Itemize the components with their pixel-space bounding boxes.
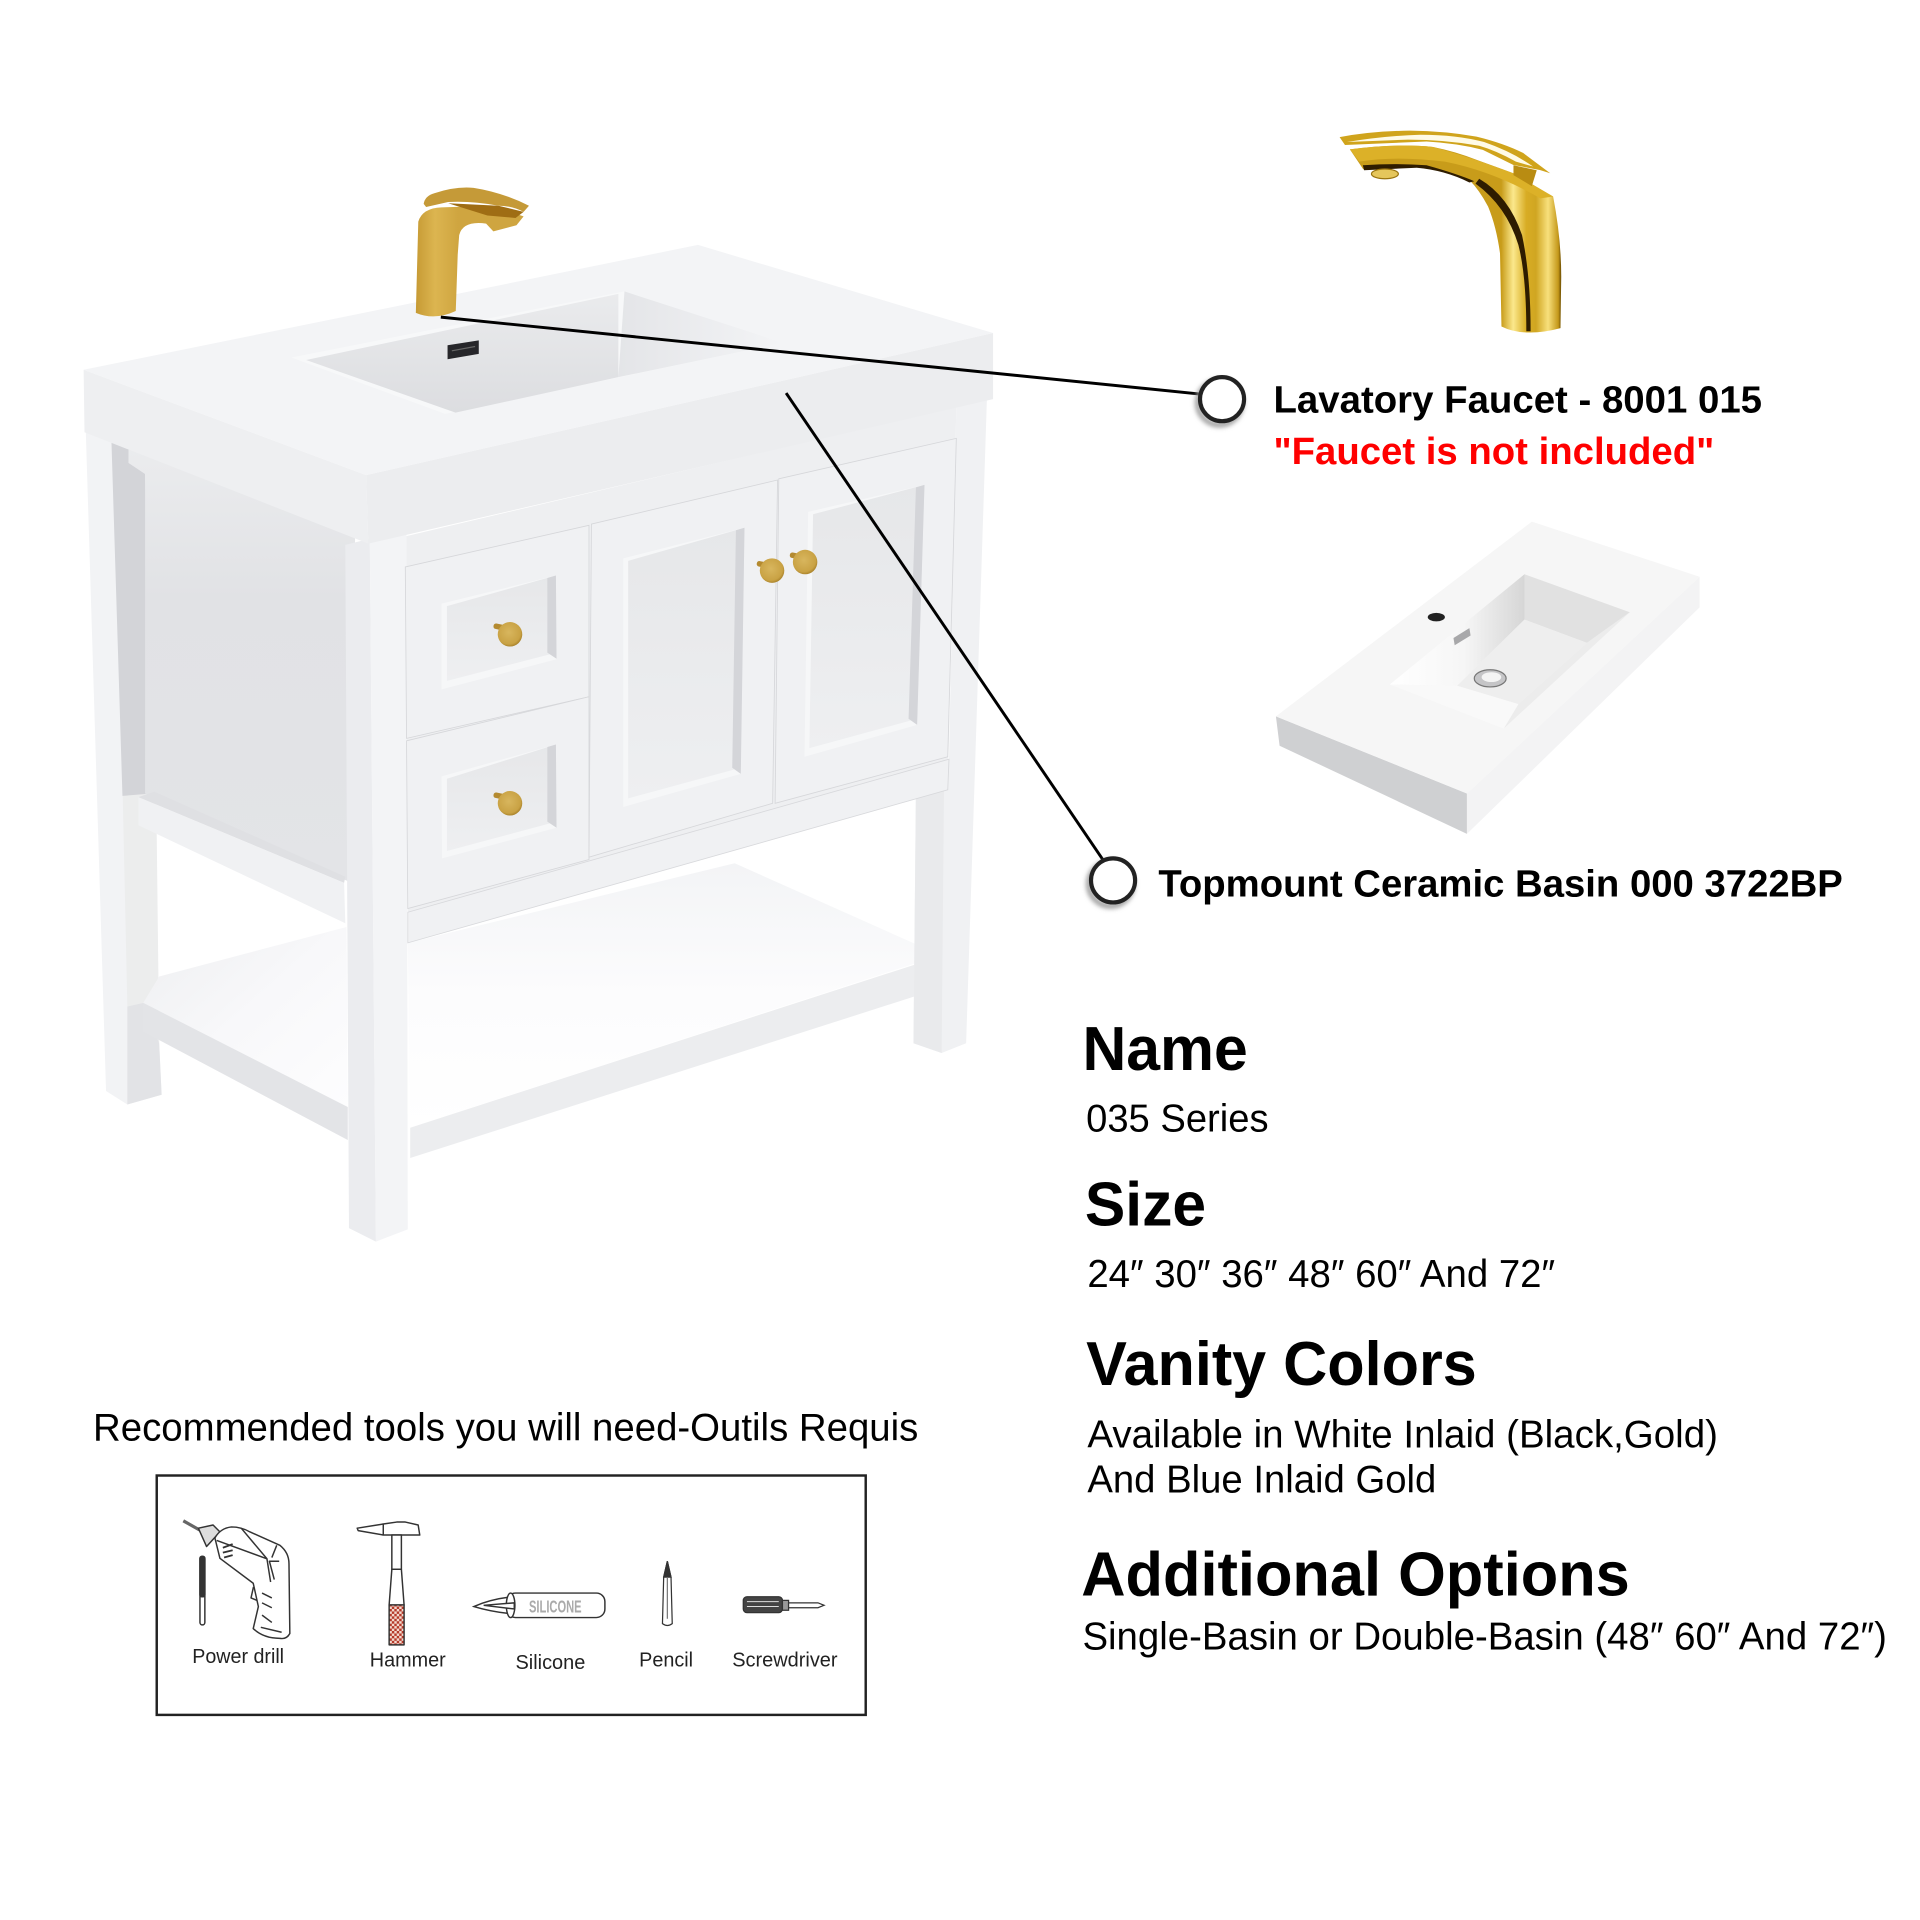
left door [589,480,778,857]
sink overflow [448,340,479,359]
icon: hammer [357,1522,420,1645]
callout marker: faucet [1198,377,1244,425]
chrome gold faucet photo [1340,131,1561,333]
left rear leg [86,429,162,1104]
icon: silicone tube [474,1593,605,1618]
heading: name: Name [1082,1014,1248,1084]
icon: silicone tube: SILICONE [529,1597,582,1617]
front left leg [345,531,408,1242]
lower shelf side edge [143,1003,348,1140]
icon: power drill [183,1521,290,1639]
silicone label: Silicone [516,1652,585,1674]
side panel with recess [111,441,355,882]
icon: screwdriver [743,1597,824,1613]
name value: 035 Series [1086,1097,1269,1140]
tools panel [157,1476,866,1715]
hammer label: Hammer [370,1650,446,1672]
size values: 24″ 30″ 36″ 48″ 60″ And 72″ [1087,1253,1555,1296]
gold faucet on vanity [416,188,529,316]
callout marker: basin [1089,858,1135,906]
basin bowl [1390,574,1630,729]
door knobs [756,550,817,583]
faucet callout label: Lavatory Faucet - 8001 015 [1273,380,1762,422]
knob [493,791,522,816]
leader line: faucet [441,317,1202,394]
cabinet front frame [405,407,956,943]
faucet not included warning: "Faucet is not included" [1273,431,1714,473]
sink bowl [291,291,784,414]
tools heading: Recommended tools you will need-Outils Requis [93,1407,918,1450]
power drill label: Power drill [192,1646,284,1668]
colors line two: And Blue Inlaid Gold [1087,1459,1436,1502]
options text: Single-Basin or Double-Basin (48″ 60″ And 72″) [1082,1615,1887,1658]
lower shelf left section [143,927,348,1107]
countertop slab [84,245,993,544]
lower shelf front edge [410,956,940,1158]
heading: additional options: Additional Options [1081,1540,1630,1610]
bottom cabinet rail [408,759,949,943]
leader line: basin [786,393,1104,862]
front right leg [913,398,987,1053]
basin callout label: Topmount Ceramic Basin 000 3722BP [1158,863,1843,905]
topmount ceramic basin photo [1276,522,1700,834]
lower shelf top section [408,863,940,1128]
knob [493,622,522,647]
top drawer [405,525,589,738]
heading: size: Size [1085,1170,1206,1240]
basin tap hole [1428,613,1445,621]
bottom drawer [407,697,589,909]
right door [775,438,956,803]
heading: vanity colors: Vanity Colors [1086,1329,1477,1399]
side stretcher [138,792,345,923]
basin overflow [1453,628,1471,645]
pencil label: Pencil [639,1650,693,1672]
colors line one: Available in White Inlaid (Black,Gold) [1087,1413,1718,1456]
vanity cabinet illustration [84,188,993,1242]
icon: pencil [662,1561,672,1626]
screwdriver label: Screwdriver [732,1650,838,1672]
basin drain [1474,670,1506,687]
